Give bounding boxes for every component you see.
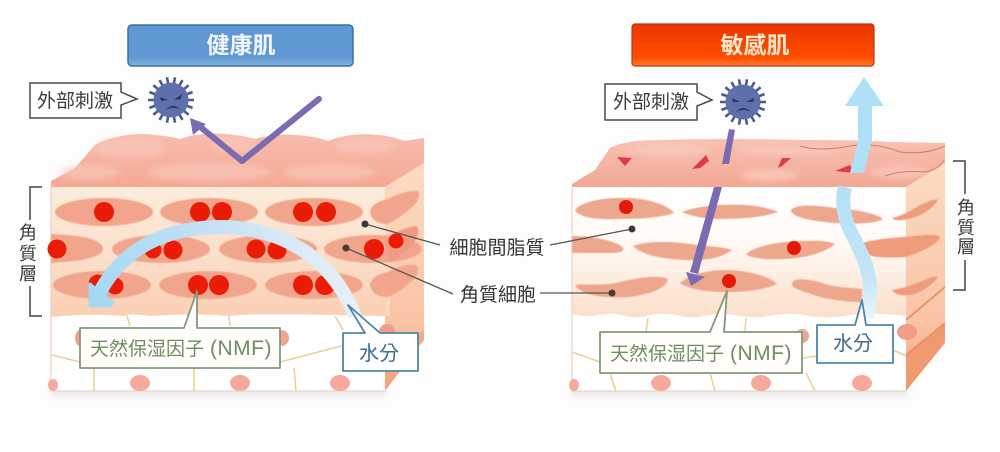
callout: external stimulus [605,84,712,120]
label: intercellular lipid: 細胞間脂質 [449,237,545,259]
bracket: stratum corneum right: 層 [957,237,975,257]
callout: water: 水分 [359,342,399,365]
heading: healthy skin [128,25,353,66]
panel: healthy skin [19,25,424,391]
label: intercellular lipid [362,220,636,259]
surface lumps [630,144,930,181]
icon: angry germ [720,79,766,125]
side face [385,163,424,391]
callout: water [343,305,418,371]
front cell layer [572,187,906,319]
nuclei [48,202,404,295]
heading: sensitive skin [632,24,874,66]
top surface [51,134,424,187]
lower cells [48,187,395,391]
panel: sensitive skin [569,24,975,391]
label: corneocyte: 角質細胞 [460,284,536,306]
surface lumps [60,138,395,181]
side shading band [385,187,390,316]
lower cells [569,187,917,391]
front cell layer [51,187,385,318]
side lower bands [906,287,945,355]
arrow: stimulus blocked [190,99,319,161]
bracket: stratum corneum right [953,161,975,290]
bracket: stratum corneum left: 角 [19,223,37,243]
corneocytes [572,198,940,302]
callout: natural moisturizing factor [80,291,280,368]
callout: external stimulus [30,83,137,118]
bracket: stratum corneum right: 角 [957,198,975,218]
corneocytes row 1 [55,191,419,226]
callout: natural moisturizing factor: 天然保湿因子 (NMF) [610,342,792,365]
callout: external stimulus: 外部刺激 [37,90,113,112]
icon: angry germ [148,77,194,123]
bracket: stratum corneum left: 質 [19,244,37,264]
top surface [572,139,945,187]
arrow: stimulus penetrates [686,129,735,286]
bracket: stratum corneum left: 層 [19,264,37,284]
bracket: stratum corneum right: 質 [957,218,975,238]
bracket: stratum corneum left [19,187,42,316]
heading: sensitive skin: 敏感肌 [720,32,790,58]
arrow: moisture escapes [843,77,884,318]
nuclei [619,200,801,288]
corneocytes row 2 [51,226,422,263]
label: corneocyte [342,244,616,306]
arrow: moisture retained [90,227,355,316]
skin block: sensitive [569,139,945,391]
corneocytes row 3 [53,265,418,299]
side lower bands [385,330,424,378]
side face [906,163,945,391]
callout: natural moisturizing factor: 天然保湿因子 (NMF) [90,337,272,360]
callout: natural moisturizing factor [600,291,802,373]
callout: external stimulus: 外部刺激 [613,91,689,113]
surface cracks [617,155,854,173]
callout: water: 水分 [833,332,873,355]
skin block: healthy [48,134,424,391]
callout: water [817,300,893,363]
heading: healthy skin: 健康肌 [206,32,276,58]
